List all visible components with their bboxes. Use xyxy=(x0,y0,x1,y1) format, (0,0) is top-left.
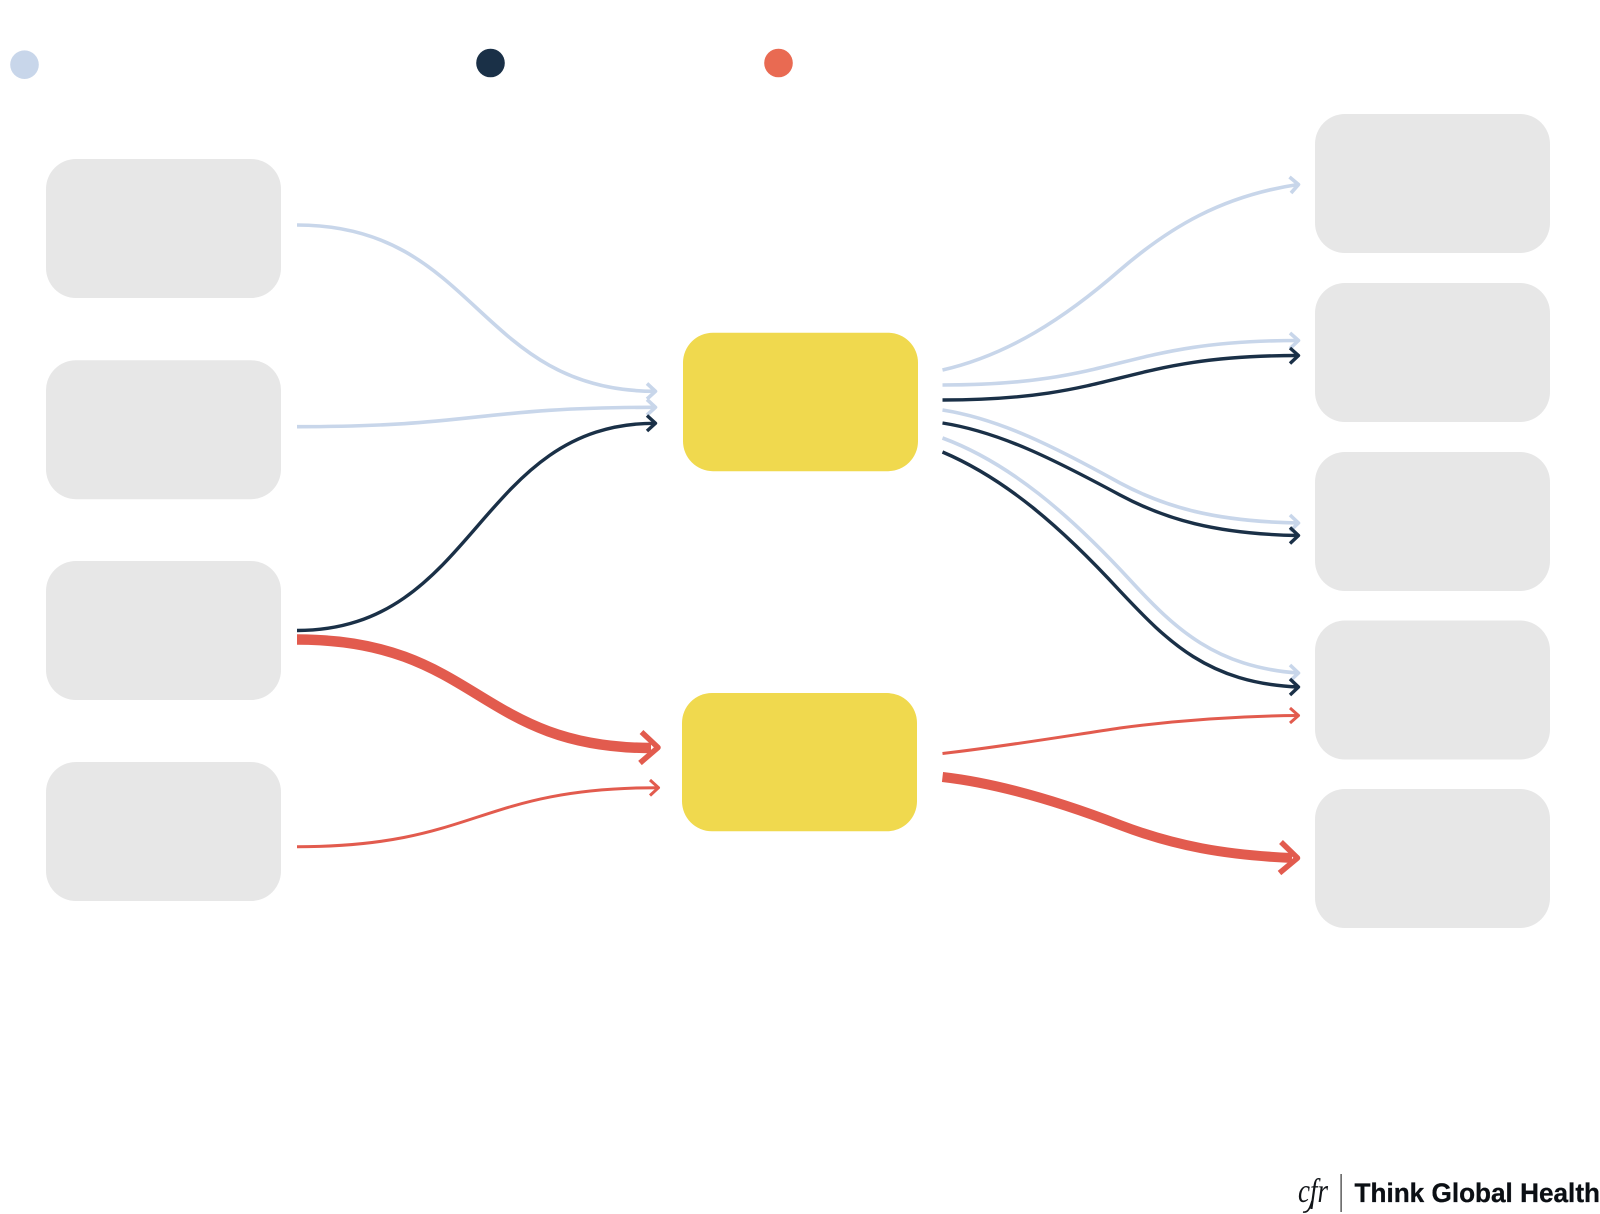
arrow: top center to right box 3 (navy) xyxy=(942,423,1298,544)
legend dot: coral xyxy=(764,49,793,77)
right box 2 xyxy=(1315,283,1550,422)
logo divider xyxy=(1340,1174,1342,1212)
legend dot: navy xyxy=(476,49,505,77)
panel: right column boxes xyxy=(1315,114,1550,928)
arrows: left to bottom center xyxy=(297,640,658,847)
arrow: left box 1 to top center xyxy=(297,225,656,399)
center box top xyxy=(683,333,918,471)
logo mark: cfr: cfr xyxy=(1298,1173,1329,1210)
arrow: top center to right box 1 xyxy=(942,177,1298,370)
arrow: top center to right box 3 (light) xyxy=(942,410,1298,531)
center box bottom xyxy=(682,693,917,831)
arrow: top center to right box 2 (navy) xyxy=(942,348,1298,400)
right box 4 xyxy=(1315,620,1550,760)
left box 1 xyxy=(46,159,281,298)
panel: center column boxes xyxy=(682,333,918,831)
left box 3 xyxy=(46,561,281,700)
arrows: bottom center to right xyxy=(942,708,1298,873)
legend xyxy=(10,49,793,79)
logo: cfr Think Global Health xyxy=(1298,1173,1600,1212)
right box 5 xyxy=(1315,789,1550,928)
right box 1 xyxy=(1315,114,1550,253)
left box 4 xyxy=(46,762,281,901)
arrow: left box 3 to bottom center (thick) xyxy=(297,640,658,763)
arrow: top center to right box 2 (light) xyxy=(942,333,1298,385)
arrow: top center to right box 4 (navy) xyxy=(942,452,1298,695)
panel: left column boxes xyxy=(46,159,281,901)
arrow: left box 4 to bottom center xyxy=(297,780,658,847)
right box 3 xyxy=(1315,452,1550,591)
arrow: bottom center to right box 5 (thick) xyxy=(942,777,1298,873)
arrows: top center to right xyxy=(942,177,1298,695)
left box 2 xyxy=(46,360,281,499)
legend dot: light blue xyxy=(10,50,39,79)
logo f descender xyxy=(1303,1201,1312,1212)
arrows: left to top center xyxy=(297,225,656,630)
arrow: bottom center to right box 4 xyxy=(942,708,1298,754)
arrow: top center to right box 4 (light) xyxy=(942,438,1298,681)
arrow: left box 3 to top center xyxy=(297,416,656,630)
arrow: left box 2 to top center xyxy=(297,400,656,427)
